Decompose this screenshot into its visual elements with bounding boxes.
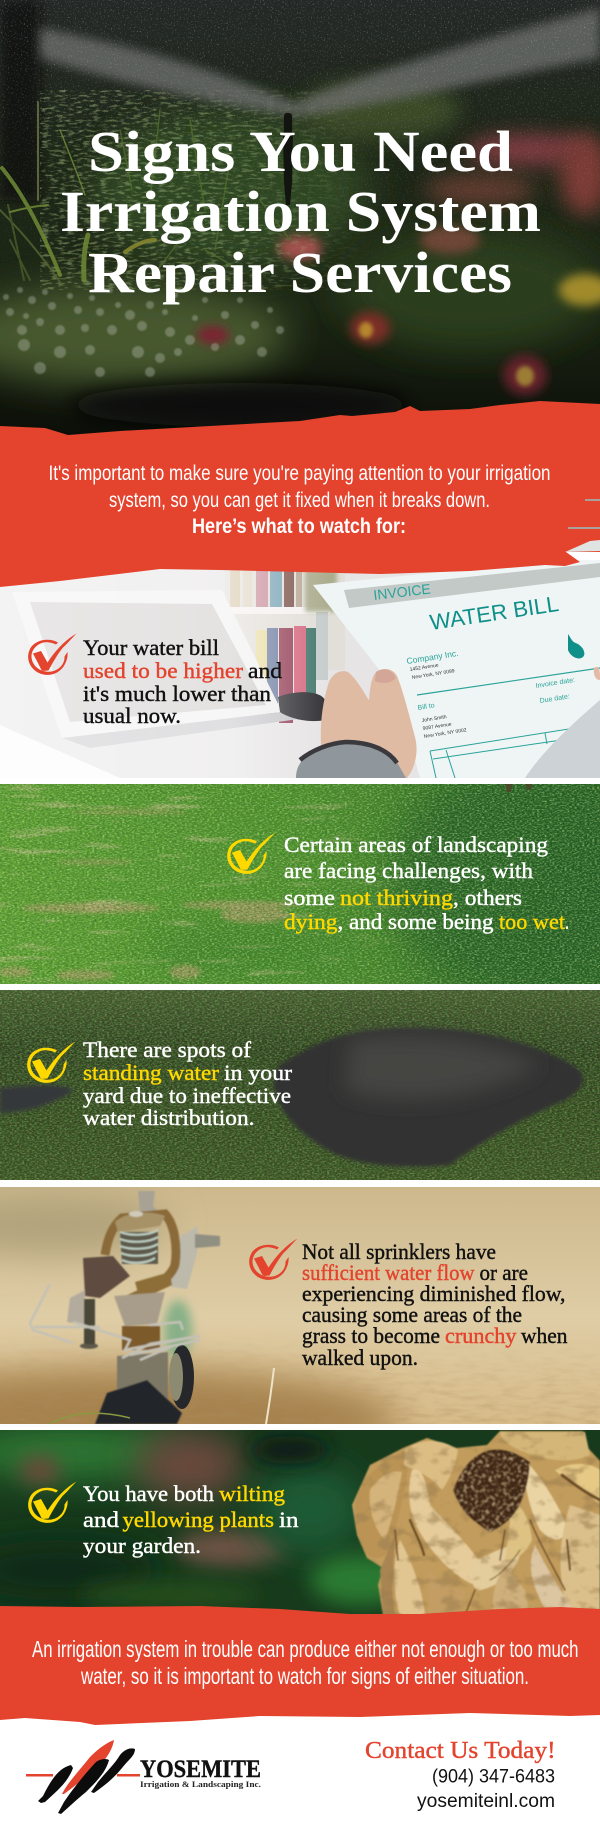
panel: water bill photo	[0, 556, 600, 778]
panel: patchy grass: .	[565, 909, 569, 934]
checkmark icon and text: water bill: Your water bill	[83, 635, 219, 660]
intro text: system, so you can get it fixed when it breaks down.	[109, 489, 490, 512]
panel: standing water	[0, 990, 600, 1180]
title: Signs You Need	[88, 119, 513, 184]
sprinkler head	[30, 1191, 220, 1424]
panel: sprinkler: sufficient water flow	[302, 1260, 475, 1285]
panel: sprinkler: experiencing diminished flow,	[302, 1281, 566, 1306]
title: Irrigation System	[60, 179, 541, 244]
closing text	[32, 1636, 578, 1689]
hero photo background	[0, 0, 600, 440]
panel: wilting plants: in	[279, 1507, 298, 1532]
checkmark icon and text: water bill: and	[248, 658, 282, 683]
panel: standing water: standing water	[83, 1060, 220, 1085]
panel: sprinkler: walked upon.	[302, 1345, 418, 1370]
checkmark icon and text: water bill: used to be higher	[83, 658, 244, 683]
panel: patchy grass: Certain areas of landscaping	[284, 832, 548, 857]
checkmark icon and text: water bill	[28, 634, 282, 728]
invoice paper: WATER BILL	[428, 591, 560, 635]
panel: patchy grass	[0, 784, 600, 984]
invoice paper: Company Inc.	[406, 648, 459, 666]
panel: wilting plants	[0, 1426, 600, 1615]
panel: sprinkler: Not all sprinklers have	[302, 1239, 496, 1264]
invoice paper	[313, 556, 600, 778]
logo	[26, 1740, 261, 1814]
panel: wilting plants: your garden.	[83, 1533, 201, 1558]
title	[60, 119, 541, 305]
wilted flower	[345, 1430, 600, 1615]
title: Repair Services	[88, 240, 512, 305]
contact block	[365, 1738, 556, 1812]
logo: YOSEMITE	[140, 1756, 261, 1783]
invoice paper: INVOICE	[373, 581, 432, 603]
panel: sprinkler	[0, 1187, 600, 1424]
panel: patchy grass: some	[284, 885, 335, 910]
invoice paper: New York, NY 0002	[423, 727, 467, 740]
panel: standing water: yard due to ineffective	[83, 1083, 291, 1108]
panel: patchy grass: , and some being	[338, 909, 494, 934]
checkmark icon and text: water bill: it's much lower than	[83, 681, 271, 706]
contact block: yosemiteinl.com	[417, 1790, 555, 1812]
contact block: Contact Us Today!	[365, 1738, 556, 1764]
invoice paper: 9087 Avenue	[422, 721, 452, 732]
panel: wilting plants: You have both	[83, 1481, 214, 1506]
contact block: (904) 347-6483	[432, 1766, 555, 1788]
panel: patchy grass: dying	[284, 909, 338, 934]
logo: Irrigation & Landscaping Inc.	[140, 1779, 261, 1789]
panel: standing water: in your	[224, 1060, 293, 1085]
panel: patchy grass: not thriving	[340, 885, 453, 910]
panel: standing water: water distribution.	[83, 1105, 254, 1130]
panel: sprinkler: when	[521, 1323, 568, 1348]
invoice paper: New York, NY 0099	[411, 668, 455, 681]
panel: sprinkler: causing some areas of the	[302, 1302, 522, 1327]
hand	[321, 669, 417, 778]
invoice paper: Invoice date:	[535, 677, 576, 690]
panel: sprinkler: crunchy	[445, 1323, 517, 1348]
panel: patchy grass: , others	[453, 885, 522, 910]
invoice paper: John Smith	[421, 714, 447, 724]
invoice paper: 1452 Avenue	[409, 662, 439, 673]
invoice paper: Due date:	[539, 693, 570, 705]
panel: wilting plants: wilting	[219, 1481, 285, 1506]
panel: patchy grass: are facing challenges, with	[284, 858, 533, 883]
panel: intro red band	[0, 401, 600, 587]
panel: patchy grass: too wet	[499, 909, 566, 934]
panel: standing water: There are spots of	[83, 1037, 252, 1062]
panel: wilting plants: and	[83, 1507, 119, 1532]
intro text: Here’s what to watch for:	[192, 515, 406, 538]
panel: closing red band	[0, 1606, 600, 1725]
panel: wilting plants: yellowing plants	[122, 1507, 274, 1532]
intro text	[48, 462, 550, 538]
checkmark icon and text: water bill: usual now.	[83, 703, 181, 728]
invoice paper: Bill to	[417, 702, 435, 712]
panel: sprinkler: or are	[480, 1260, 528, 1285]
panel: sprinkler: grass to become	[302, 1323, 440, 1348]
